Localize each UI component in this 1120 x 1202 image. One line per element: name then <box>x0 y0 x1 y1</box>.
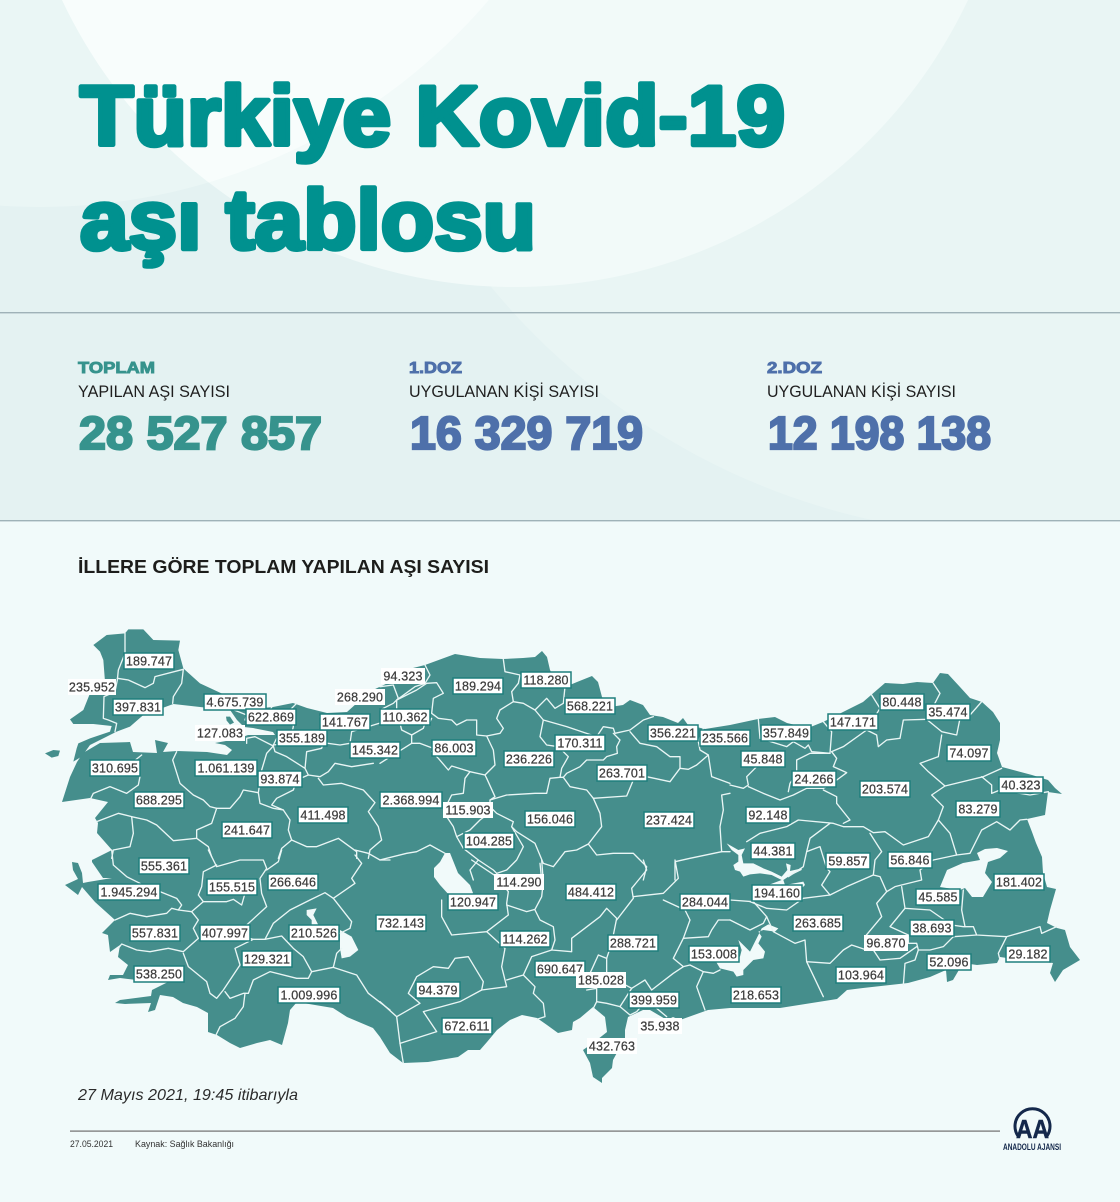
label: Ağrı: 83.279 <box>958 802 998 816</box>
label: Aksaray: 120.947 <box>450 896 496 910</box>
lakes <box>307 843 1008 977</box>
label: Giresun: 235.566 <box>702 732 748 746</box>
label: Kocaeli: 622.869 <box>248 710 294 724</box>
label: Karaman: 94.379 <box>418 984 458 998</box>
map: Türkiye provinces <box>45 629 1080 1083</box>
label: Samsun: 568.221 <box>567 700 613 714</box>
label: Kırşehir: 104.285 <box>466 834 512 848</box>
label: Batman: 96.870 <box>866 936 906 950</box>
province borders: east <box>730 683 1057 997</box>
stat: 2. doz <box>767 360 991 459</box>
label: Mardin: 103.964 <box>838 968 884 982</box>
stat: 2. doz: UYGULANAN KİŞİ SAYISI <box>767 382 956 401</box>
province borders: aegean and west mediterranean <box>112 850 390 1035</box>
label: Balıkesir: 688.295 <box>136 794 182 808</box>
title <box>80 69 785 267</box>
province value labels <box>68 653 1050 1054</box>
label: Bursa: 1.061.139 <box>198 762 254 776</box>
label: Uşak: 155.515 <box>209 880 255 894</box>
footer source: Kaynak: Sağlık Bakanlığı <box>135 1139 234 1149</box>
label: Sinop: 118.280 <box>523 674 569 688</box>
label: Ordu: 356.221 <box>650 726 696 740</box>
stat: 1. doz <box>409 360 643 459</box>
label: Erzincan: 92.148 <box>748 808 788 822</box>
label: Muş: 56.846 <box>890 854 930 868</box>
footer date: 27.05.2021 <box>70 1139 113 1149</box>
label: Adıyaman: 153.008 <box>691 948 737 962</box>
label: Bitlis: 45.585 <box>918 890 958 904</box>
stat: toplam: 28 527 857 <box>79 407 322 459</box>
label: Bolu: 145.342 <box>352 744 398 758</box>
label: Çorum: 236.226 <box>506 752 552 766</box>
label: Sivas: 237.424 <box>646 814 692 828</box>
label: Adana: 690.647 <box>537 962 583 976</box>
label: Gümüşhane: 45.848 <box>743 752 783 766</box>
title: aşı tablosu <box>80 173 536 267</box>
logo: Anadolu Ajansı: ANADOLU AJANSI <box>1003 1142 1061 1152</box>
divider: top <box>0 312 1120 313</box>
label: Yozgat: 156.046 <box>527 812 573 826</box>
label: Bilecik: 93.874 <box>260 772 300 786</box>
label: İstanbul: 4.675.739 <box>207 696 263 710</box>
label: Elazığ: 194.160 <box>754 886 800 900</box>
date note: 27 Mayıs 2021, 19:45 itibarıyla <box>77 1087 298 1104</box>
stat: toplam: TOPLAM <box>78 360 155 377</box>
stat: 1. doz: 1.DOZ <box>409 360 462 377</box>
stat: 2. doz: 2.DOZ <box>767 360 822 377</box>
label: Van: 181.402 <box>996 876 1042 890</box>
label: Düzce: 141.767 <box>322 716 368 730</box>
label: Denizli: 407.997 <box>202 926 248 940</box>
label: Kütahya: 241.647 <box>224 824 270 838</box>
label: Tunceli: 44.381 <box>753 844 793 858</box>
label: Karabük: 110.362 <box>382 710 428 724</box>
label: Hatay: 432.763 <box>589 1040 635 1054</box>
label: Çankırı: 86.003 <box>434 742 474 756</box>
label: Isparta: 210.526 <box>291 926 337 940</box>
label: Kastamonu: 189.294 <box>455 680 501 694</box>
header background with soft circles <box>0 182 872 520</box>
label: Burdur: 129.321 <box>244 952 290 966</box>
label: Şanlıurfa: 218.653 <box>733 988 779 1002</box>
label: Ardahan: 35.474 <box>928 706 968 720</box>
label: Gaziantep area: 399.959 <box>631 994 677 1008</box>
label: Ankara: 2.368.994 <box>383 794 439 808</box>
label: Aydın: 557.831 <box>132 926 178 940</box>
stat: 2. doz: 12 198 138 <box>768 407 991 459</box>
province borders: north-west <box>90 633 390 858</box>
label: İzmir: 1.945.294 <box>101 886 157 900</box>
label: Kırklareli: 189.747 <box>126 654 172 668</box>
stat: toplam: YAPILAN AŞI SAYISI <box>78 382 230 401</box>
label: Artvin: 80.448 <box>882 696 922 710</box>
label: Yalova: 127.083 <box>197 726 243 740</box>
label: Sakarya: 355.189 <box>279 732 325 746</box>
title: Türkiye Kovid-19 <box>80 69 785 163</box>
label: Eskişehir: 411.498 <box>300 808 346 822</box>
divider: middle <box>0 520 1120 521</box>
province borders: central south <box>380 860 730 1063</box>
stat: 1. doz: UYGULANAN KİŞİ SAYISI <box>409 382 599 401</box>
label: Trabzon: 357.849 <box>763 726 809 740</box>
label: Malatya: 284.044 <box>682 896 728 910</box>
label: Çanakkale: 310.695 <box>92 762 138 776</box>
label: Kahramanmaraş: 288.721 <box>610 936 656 950</box>
label: Hakkari: 29.182 <box>1008 948 1048 962</box>
label: Kilis: 35.938 <box>640 1020 680 1034</box>
label: Tekirdağ: 397.831 <box>115 700 161 714</box>
label: Niğde: 114.262 <box>502 932 548 946</box>
label: Tokat: 263.701 <box>599 766 645 780</box>
label: Erzurum: 203.574 <box>862 782 908 796</box>
label: Kars: 74.097 <box>949 746 989 760</box>
logo: Anadolu Ajansı: AA <box>1016 1114 1049 1144</box>
label: Kayseri: 484.412 <box>568 886 614 900</box>
label: Bartın: 94.323 <box>383 670 423 684</box>
label: Şırnak: 52.096 <box>929 956 969 970</box>
stat: toplam <box>78 360 322 459</box>
label: Nevşehir: 114.290 <box>496 876 542 890</box>
label: Edirne: 235.952 <box>69 680 115 694</box>
label: Afyonkarahisar: 266.646 <box>270 876 316 890</box>
label: Siirt: 38.693 <box>912 922 952 936</box>
map heading: İLLERE GÖRE TOPLAM YAPILAN AŞI SAYISI <box>78 557 489 577</box>
map land: Thrace <box>45 629 234 762</box>
label: Bingöl: 59.857 <box>828 854 868 868</box>
label: Kırıkkale: 115.903 <box>445 804 491 818</box>
label: Konya: 732.143 <box>378 916 424 930</box>
logo: Anadolu Ajansı <box>1003 1109 1061 1152</box>
label: Muğla area: 538.250 <box>136 968 182 982</box>
label: Antalya: 1.009.996 <box>281 988 337 1002</box>
province borders: black sea and central north <box>380 659 730 880</box>
footer rule <box>70 1130 1000 1132</box>
label: Rize: 147.171 <box>830 716 876 730</box>
map land: Anatolia <box>62 651 1080 1083</box>
label: Mersin: 672.611 <box>444 1020 490 1034</box>
label: Manisa: 555.361 <box>141 860 187 874</box>
label: Osmaniye: 185.028 <box>578 974 624 988</box>
label: Amasya: 170.311 <box>557 736 603 750</box>
label: Iğdır: 40.323 <box>1001 778 1041 792</box>
label: Diyarbakır: 263.685 <box>795 916 841 930</box>
label: Bayburt: 24.266 <box>794 772 834 786</box>
stat: 1. doz: 16 329 719 <box>410 407 643 459</box>
label: Zonguldak: 268.290 <box>337 690 383 704</box>
